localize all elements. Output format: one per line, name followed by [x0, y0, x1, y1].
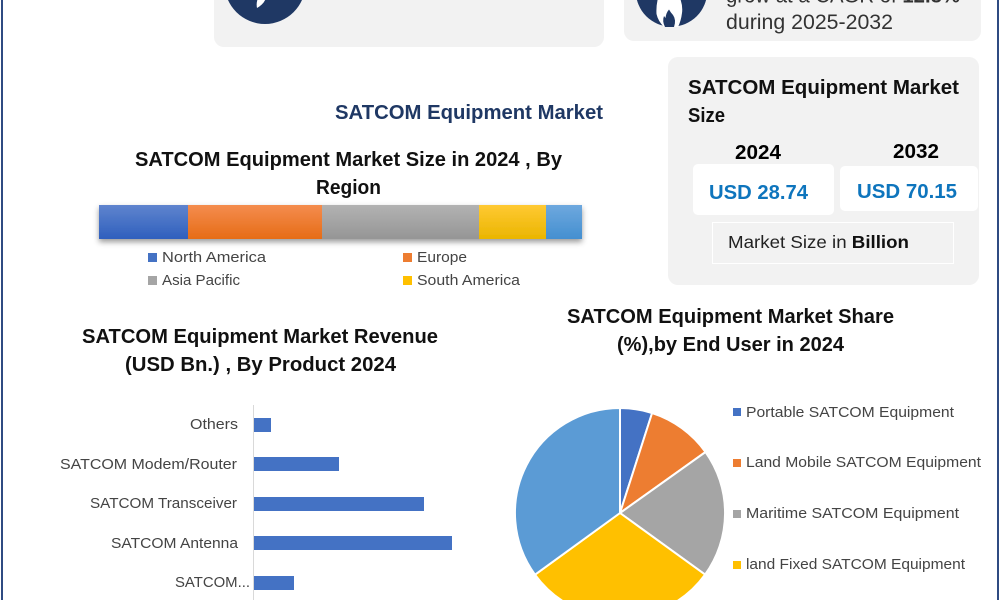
icon: top left badge	[224, 0, 306, 24]
share chart heading	[567, 306, 894, 356]
product chart heading: SATCOM Equipment Market Revenue	[82, 326, 438, 348]
panel: top right CAGR callout	[624, 0, 981, 41]
region legend: North America	[162, 249, 267, 266]
region legend: Asia Pacific	[162, 272, 240, 289]
product chart heading: (USD Bn.) , By Product 2024	[125, 354, 397, 376]
market size heading: Size	[688, 105, 725, 127]
chart: market share by end user	[515, 306, 982, 600]
icon: flame badge	[636, 0, 707, 27]
share chart heading: (%),by End User in 2024	[617, 334, 845, 356]
value: 2024: 2024	[735, 142, 782, 164]
category labels: SATCOM Modem/Router	[60, 456, 237, 473]
bars	[254, 418, 452, 590]
pie legend: Maritime SATCOM Equipment	[746, 505, 960, 522]
category labels	[60, 416, 250, 591]
CAGR text: during 2025-2032	[726, 11, 893, 34]
chart: market size by region	[99, 149, 582, 289]
share chart heading: SATCOM Equipment Market Share	[567, 306, 894, 328]
region chart heading	[135, 149, 563, 199]
panel: top left callout	[214, 0, 604, 47]
unit note	[712, 222, 954, 264]
pie legend: land Fixed SATCOM Equipment	[746, 556, 966, 573]
unit note: Market Size in Billion	[728, 232, 909, 252]
market size heading: SATCOM Equipment Market	[688, 77, 959, 99]
value: 2032: USD 70.15	[857, 181, 957, 203]
pie legend: Land Mobile SATCOM Equipment	[746, 454, 982, 471]
region legend: South America	[417, 272, 521, 289]
main title: SATCOM Equipment Market	[335, 102, 603, 124]
pie legend: Portable SATCOM Equipment	[746, 404, 955, 421]
product chart heading	[82, 326, 438, 376]
value: 2024: USD 28.74	[709, 182, 809, 204]
value: 2032	[840, 141, 978, 211]
value: 2032: 2032	[893, 141, 939, 163]
region legend: Europe	[417, 249, 467, 266]
value: 2024	[693, 142, 834, 215]
region legend	[148, 249, 521, 289]
pie chart	[515, 408, 725, 600]
category labels: SATCOM Transceiver	[90, 495, 237, 512]
category labels: Others	[190, 416, 238, 433]
region chart heading: SATCOM Equipment Market Size in 2024 , By	[135, 149, 563, 171]
region chart heading: Region	[316, 177, 381, 199]
category labels: SATCOM Antenna	[111, 535, 239, 552]
CAGR text	[726, 0, 960, 34]
chart: revenue by product	[60, 326, 452, 600]
pie legend	[733, 404, 982, 573]
market size heading	[688, 77, 959, 127]
panel: market size	[668, 57, 979, 285]
category labels: SATCOM...	[175, 574, 250, 591]
stacked bar	[99, 205, 582, 239]
